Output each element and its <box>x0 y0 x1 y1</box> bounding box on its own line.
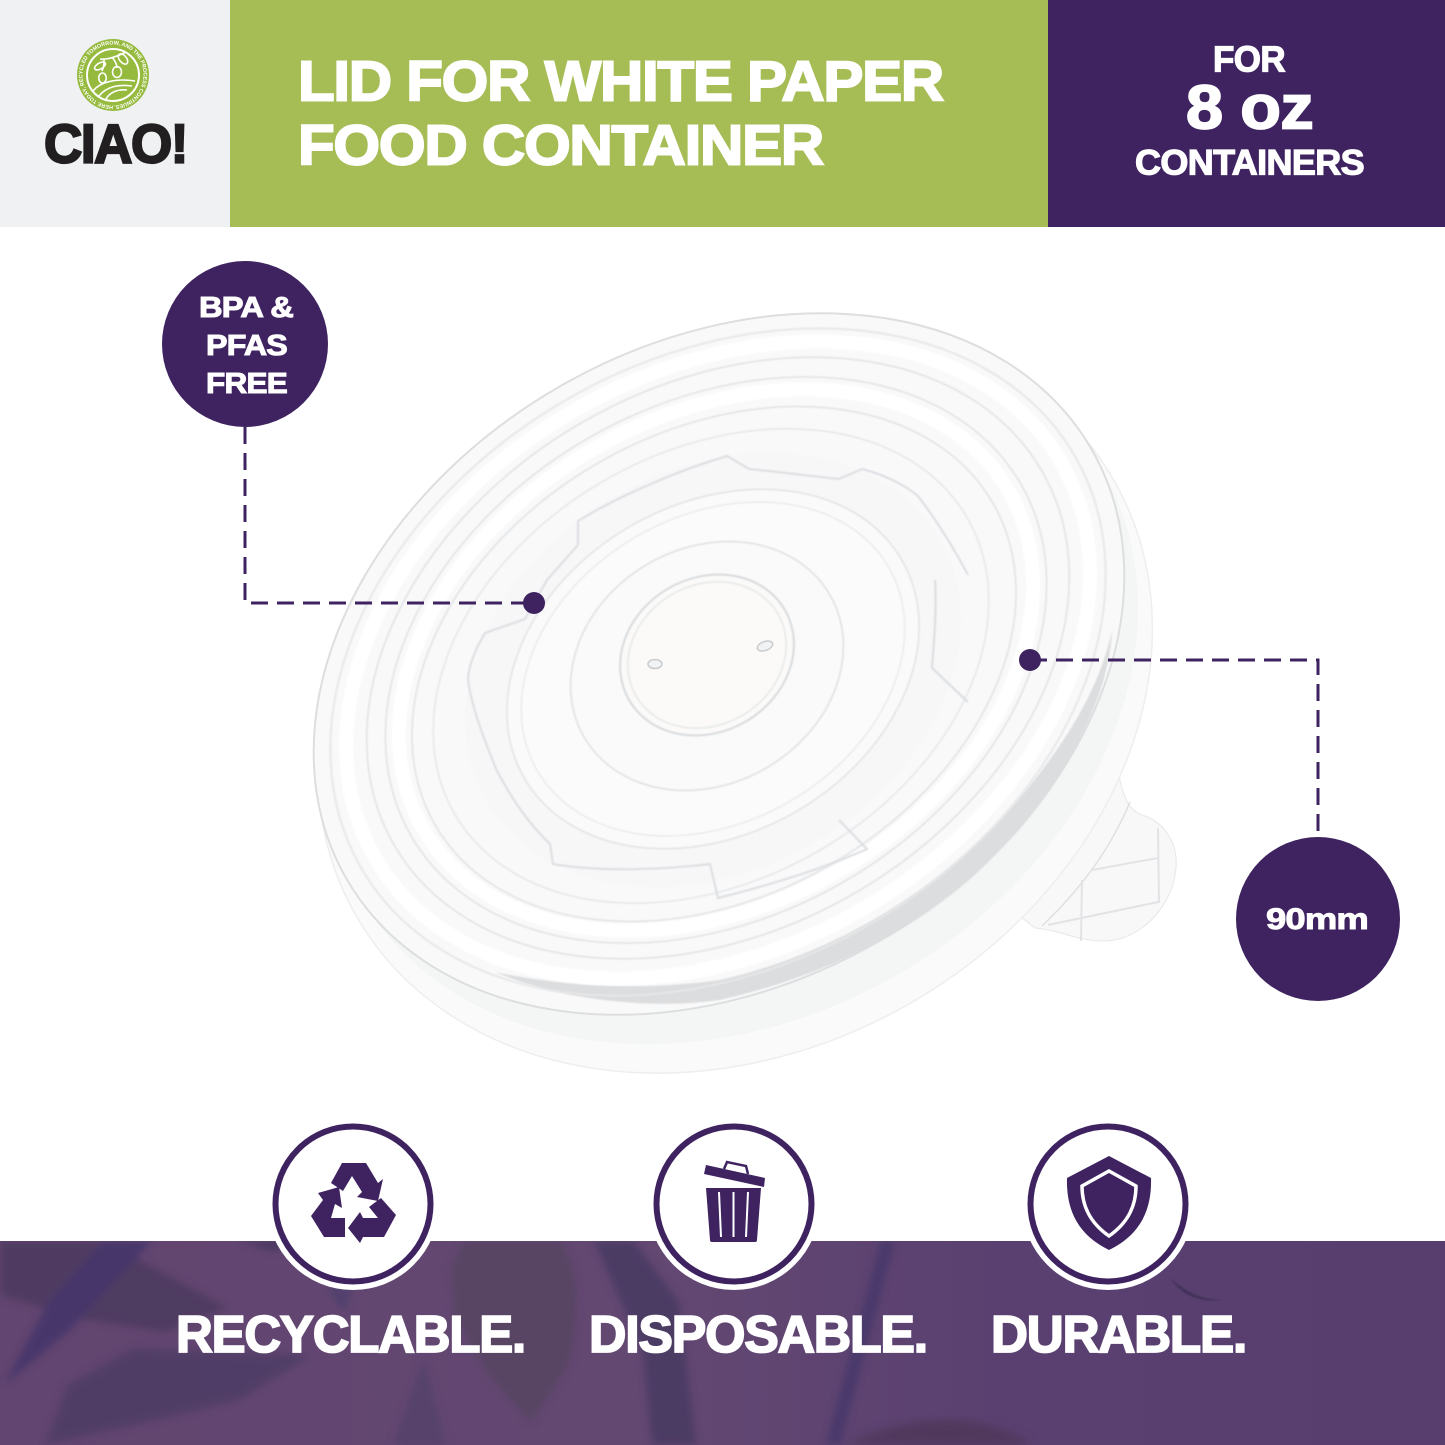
callout marker dot <box>1019 649 1041 671</box>
icon: shield in ring <box>1022 1118 1194 1290</box>
icon: round green logo badge: HERE TODAY, RECYCLED TOMORROW, AND THE PROCESS CONTINUES. <box>78 40 148 110</box>
callout: BPA and PFAS free <box>162 261 545 614</box>
header: title panel <box>230 0 1048 227</box>
lid lower rim <box>181 175 1289 1221</box>
callout badge text: 90mm <box>1266 903 1368 936</box>
lid vent holes <box>648 639 774 668</box>
feature: durable <box>991 1118 1246 1364</box>
lid stacking recess <box>386 366 1040 974</box>
icon: trash can in ring <box>648 1118 820 1290</box>
callout badge text: PFAS <box>206 330 287 362</box>
callout leader line <box>1030 660 1318 838</box>
product: translucent plastic lid <box>181 172 1289 1221</box>
callout leader line <box>245 427 534 603</box>
label: recyclable: RECYCLABLE. <box>176 1306 525 1364</box>
logo wordmark: CIAO! <box>44 112 187 174</box>
callout badge text: FREE <box>206 368 287 400</box>
size text <box>1135 38 1364 182</box>
icon: recycling arrows in ring <box>267 1118 439 1290</box>
title: FOOD CONTAINER <box>298 114 823 178</box>
lid concentric rings <box>210 194 1226 1130</box>
callout marker dot <box>523 592 545 614</box>
footer band with leaf background <box>0 1241 1445 1445</box>
callout: 90mm diameter <box>1019 649 1400 1001</box>
feature: recyclable <box>176 1118 525 1364</box>
lid pull tab <box>1000 776 1176 941</box>
header: size panel <box>1048 0 1445 227</box>
title <box>298 50 943 178</box>
size text: FOR <box>1213 38 1286 80</box>
callout badge <box>162 261 328 427</box>
title: LID FOR WHITE PAPER <box>298 50 943 114</box>
label: disposable: DISPOSABLE. <box>589 1306 927 1364</box>
size text: CONTAINERS <box>1135 144 1364 182</box>
header: logo panel <box>0 0 230 227</box>
callout badge <box>1236 837 1400 1001</box>
lid top surface <box>187 172 1251 1156</box>
size text: 8 oz <box>1186 74 1313 142</box>
lid rim shadow band <box>495 630 1112 1004</box>
feature: disposable <box>589 1118 927 1364</box>
lid central disc and rings <box>442 417 984 921</box>
label: durable: DURABLE. <box>991 1306 1246 1364</box>
callout badge text <box>199 292 294 400</box>
callout badge text: BPA & <box>199 292 294 324</box>
